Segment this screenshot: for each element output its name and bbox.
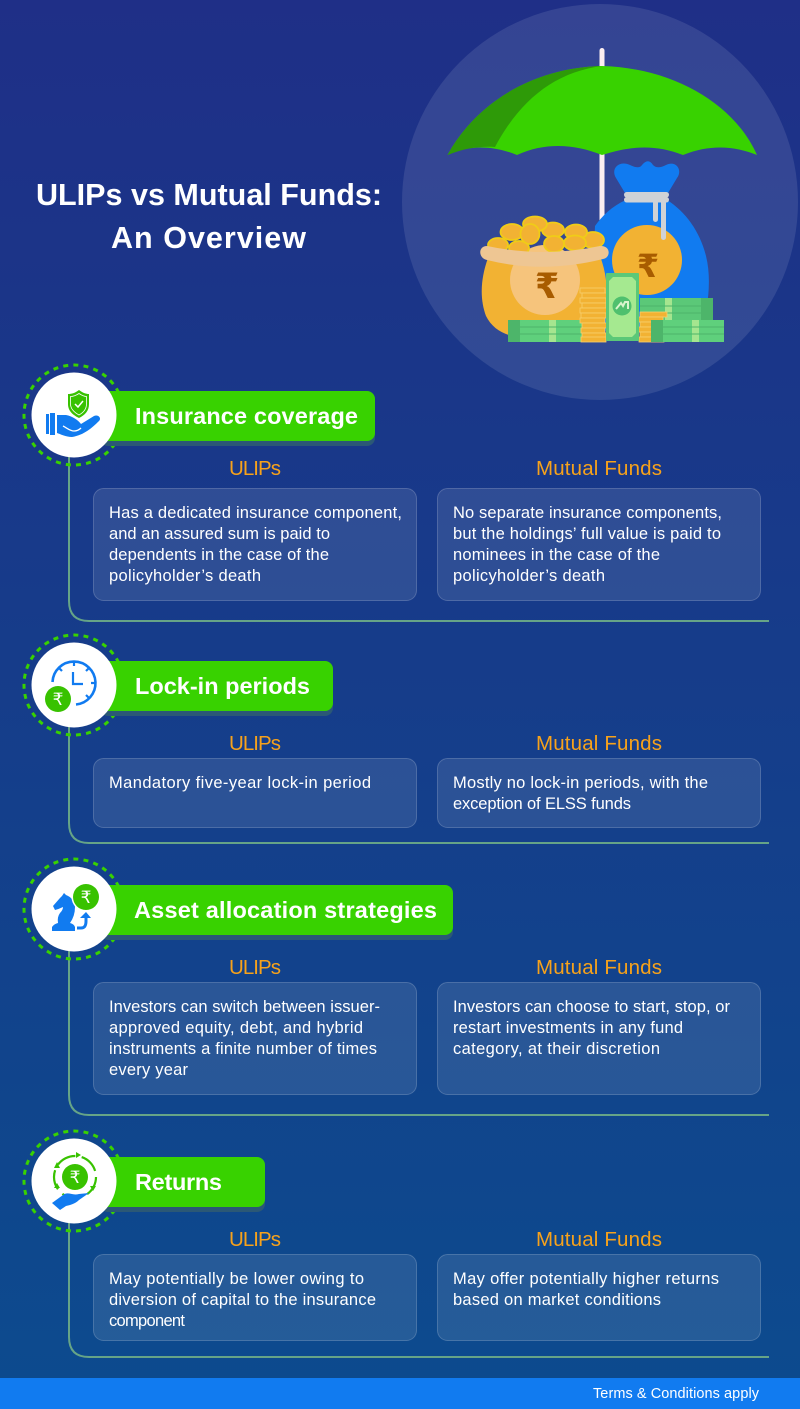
section: insurance coverage	[24, 365, 760, 600]
column heading: Mutual Funds: Mutual Funds	[536, 732, 662, 755]
title: ULIPs vs Mutual Funds:	[36, 178, 382, 212]
card: ULIPs insurance: policyholder’s death	[109, 567, 261, 585]
icon: gold coin bag	[480, 216, 609, 338]
connector line: insurance coverage	[69, 450, 769, 621]
icon: blue money bag	[590, 161, 709, 335]
card: ULIPs returns: diversion of capital to the insurance	[109, 1291, 376, 1309]
card: Mutual Funds asset allocation	[438, 982, 760, 1094]
card: Mutual Funds returns: based on market conditions	[453, 1291, 661, 1309]
column heading: Mutual Funds: Mutual Funds	[536, 457, 662, 480]
card: ULIPs insurance	[94, 488, 416, 600]
column heading: Mutual Funds: Mutual Funds	[536, 956, 662, 979]
column heading: ULIPs: ULIPs	[229, 732, 281, 755]
decorative icon ring	[24, 635, 124, 735]
footer bar	[0, 1378, 800, 1409]
column heading: ULIPs: ULIPs	[229, 457, 281, 480]
card: Mutual Funds lock-in: Mostly no lock-in periods, with the	[453, 774, 708, 792]
icon: front right cash stack	[651, 320, 724, 342]
card: Mutual Funds lock-in: exception of ELSS funds	[453, 795, 631, 813]
heading: Lock-in periods	[135, 673, 310, 699]
heading: Asset allocation strategies	[134, 897, 437, 923]
icon: hand holding shield	[46, 390, 100, 437]
card: Mutual Funds insurance: nominees in the case of the	[453, 546, 660, 564]
card: Mutual Funds insurance: but the holdings’ full value is paid to	[453, 525, 721, 543]
card: ULIPs lock-in	[94, 758, 416, 828]
section: asset allocation strategies	[24, 859, 760, 1094]
section: returns	[24, 1131, 760, 1340]
card: Mutual Funds insurance	[438, 488, 760, 600]
column heading: ULIPs: ULIPs	[229, 1228, 281, 1251]
icon: green umbrella canopy	[448, 66, 757, 155]
icon: left cash stack	[508, 320, 582, 342]
card: ULIPs asset allocation	[94, 982, 416, 1094]
connector line: returns	[69, 1216, 769, 1357]
icon: clock with rupee	[44, 662, 95, 713]
card: Mutual Funds insurance: policyholder’s death	[453, 567, 605, 585]
card: Mutual Funds returns	[438, 1254, 760, 1340]
icon: gold coin bag: ₹	[535, 267, 559, 306]
connector line: asset allocation	[69, 944, 769, 1115]
column heading: ULIPs: ULIPs	[229, 956, 281, 979]
icon: banknote	[606, 273, 639, 341]
icon: chess knight with rupee	[52, 882, 100, 931]
decorative icon ring	[24, 859, 124, 959]
section: lock-in periods	[24, 635, 760, 828]
card: Mutual Funds asset allocation: category, at their discretion	[453, 1040, 660, 1058]
decorative icon ring	[24, 1131, 124, 1231]
column heading: Mutual Funds: Mutual Funds	[536, 1228, 662, 1251]
card: ULIPs asset allocation: every year	[109, 1061, 188, 1079]
footer bar: Terms & Conditions apply	[593, 1386, 760, 1402]
connector line: lock-in periods	[69, 720, 769, 843]
card: ULIPs lock-in: Mandatory five-year lock-in period	[109, 774, 371, 792]
title	[36, 178, 382, 255]
icon: chess knight with rupee: ₹	[81, 888, 91, 907]
card: Mutual Funds returns: May offer potentially higher returns	[453, 1270, 719, 1288]
icon: centre coin stack	[580, 288, 607, 342]
card: ULIPs asset allocation: Investors can switch between issuer-	[109, 998, 380, 1016]
card: ULIPs returns: May potentially be lower owing to	[109, 1270, 364, 1288]
card: ULIPs insurance: and an assured sum is paid to	[109, 525, 330, 543]
card: Mutual Funds asset allocation: restart investments in any fund	[453, 1019, 683, 1037]
card: Mutual Funds insurance: No separate insurance components,	[453, 504, 722, 522]
heading: Returns	[135, 1169, 222, 1195]
icon: hand with circulating rupee	[52, 1152, 96, 1210]
decorative icon ring	[24, 365, 124, 465]
card: ULIPs returns: component	[109, 1312, 185, 1330]
card: ULIPs asset allocation: instruments a finite number of times	[109, 1040, 377, 1058]
title: An Overview	[111, 221, 306, 255]
icon: clock with rupee: ₹	[53, 690, 63, 709]
icon: right coin stack	[638, 312, 667, 342]
card: Mutual Funds asset allocation: Investors can choose to start, stop, or	[453, 998, 730, 1016]
icon: back cash stack	[640, 298, 713, 320]
card: ULIPs insurance: Has a dedicated insurance component,	[109, 504, 402, 522]
icon: blue money bag: ₹	[637, 248, 659, 284]
card: ULIPs insurance: dependents in the case of the	[109, 546, 329, 564]
illustration: umbrella over money bags	[402, 4, 798, 400]
icon: hand with circulating rupee: ₹	[70, 1168, 80, 1187]
heading: Insurance coverage	[135, 403, 358, 429]
card: Mutual Funds lock-in	[438, 758, 760, 828]
card: ULIPs returns	[94, 1254, 416, 1340]
card: ULIPs asset allocation: approved equity, debt, and hybrid	[109, 1019, 363, 1037]
